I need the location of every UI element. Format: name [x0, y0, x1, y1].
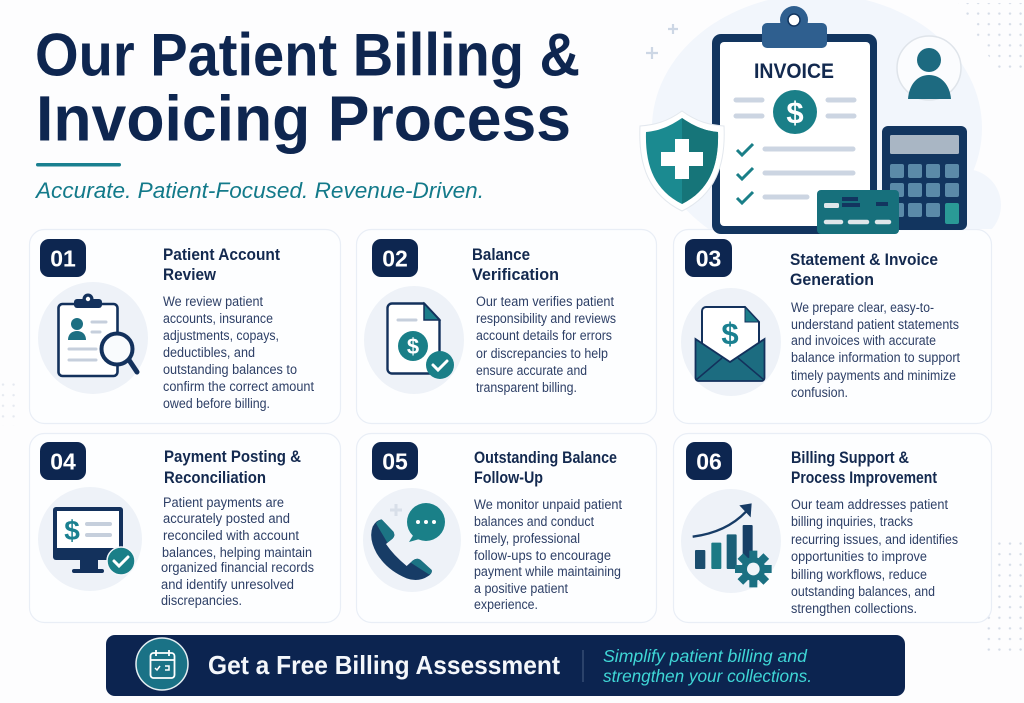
clipboard: $ [786, 95, 804, 130]
body text [474, 497, 622, 612]
badge 04: 04 [50, 448, 76, 474]
heading: Reconciliation [164, 469, 266, 487]
heading: Follow-Up [474, 469, 543, 487]
call to action label: Get a Free Billing Assessment [208, 650, 560, 680]
heading: Billing Support & [791, 449, 909, 467]
call to action subtext: Simplify patient billing and [603, 646, 808, 666]
body text: transparent billing. [476, 380, 577, 395]
body text [791, 300, 960, 400]
heading: Statement & Invoice [790, 251, 938, 269]
body text: and invoices with accurate [791, 333, 936, 348]
patient avatar [897, 36, 961, 100]
badge 03: 03 [696, 246, 721, 272]
badge 01 [40, 239, 86, 277]
body text: billing inquiries, tracks [791, 514, 913, 529]
body text: adjustments, copays, [163, 328, 279, 343]
body text: Patient payments are [163, 495, 284, 510]
body text [161, 495, 314, 608]
body text [476, 294, 616, 395]
icon: growth chart with gear [681, 489, 781, 595]
body text: understand patient statements [791, 317, 959, 332]
badge 06 [686, 442, 732, 480]
panel: step 05 [356, 434, 656, 622]
clipboard [712, 6, 877, 234]
body text: Our team verifies patient [476, 294, 614, 309]
icon: monitor with payment: $ [64, 515, 80, 546]
body text: Our team addresses patient [791, 497, 948, 512]
body text: ensure accurate and [476, 363, 587, 378]
badge 01: 01 [50, 246, 76, 272]
body text: We review patient [163, 294, 263, 309]
badge 02 [372, 239, 418, 277]
body text: strengthen collections. [791, 601, 917, 616]
body text: We prepare clear, easy-to- [791, 300, 934, 315]
heading: Process Improvement [791, 469, 937, 487]
accent rule [36, 163, 121, 166]
body text: outstanding balances to [163, 362, 297, 377]
heading: Outstanding Balance [474, 449, 617, 467]
heading [163, 246, 280, 284]
hero illustration [639, 0, 1001, 234]
shield [640, 111, 724, 211]
badge 05 [372, 442, 418, 480]
body text: responsibility and reviews [476, 311, 616, 326]
body text: a positive patient [474, 581, 568, 596]
body text: timely, professional [474, 531, 580, 546]
icon: calendar [136, 638, 188, 690]
body text: timely payments and minimize [791, 368, 956, 383]
title [35, 22, 580, 154]
body text: balances, helping maintain [162, 545, 312, 560]
panel: step 03 [674, 230, 992, 424]
heading [790, 251, 938, 289]
body text: organized financial records [161, 560, 314, 575]
icon: monitor with payment [38, 487, 142, 591]
body text: or discrepancies to help [476, 346, 608, 361]
call to action subtext [603, 646, 812, 686]
body text: payment while maintaining [474, 564, 621, 579]
body text: billing workflows, reduce [791, 567, 927, 582]
badge 06: 06 [696, 448, 722, 474]
icon: envelope with statement [681, 288, 781, 396]
panel: step 01 [30, 230, 340, 424]
badge 04 [40, 442, 86, 480]
icon: clipboard with magnifier [38, 282, 148, 394]
body text: owed before billing. [163, 396, 270, 411]
heading [164, 448, 301, 487]
body text: balances and conduct [474, 514, 594, 529]
panel: step 04 [30, 434, 340, 622]
panel: step 02 [356, 230, 656, 424]
body text: recurring issues, and identifies [791, 532, 958, 547]
body text: follow-ups to encourage [474, 548, 611, 563]
calculator [882, 126, 967, 230]
body text: opportunities to improve [791, 549, 927, 564]
body text: accurately posted and [163, 511, 290, 526]
panel: step 06 [674, 434, 992, 622]
heading [791, 449, 937, 487]
body text: discrepancies. [161, 593, 242, 608]
body text: balance information to support [791, 350, 960, 365]
body text: confirm the correct amount [163, 379, 314, 394]
body text: and identify unresolved [161, 577, 294, 592]
icon: envelope with statement: $ [721, 316, 739, 351]
body text: experience. [474, 597, 538, 612]
body text: deductibles, and [163, 345, 255, 360]
icon: phone with chat bubble [363, 488, 461, 592]
icon: document with dollar and check: $ [407, 334, 419, 359]
heading: Payment Posting & [164, 448, 301, 466]
heading: Verification [472, 266, 559, 284]
body text [163, 294, 314, 411]
call to action subtext: strengthen your collections. [603, 666, 812, 686]
badge 02: 02 [382, 246, 408, 272]
icon: document with dollar and check [364, 286, 464, 394]
badge 05: 05 [382, 448, 408, 474]
call to action banner [106, 635, 905, 696]
heading [472, 246, 559, 284]
tagline: Accurate. Patient-Focused. Revenue-Driven. [34, 178, 484, 203]
heading: Generation [790, 271, 874, 289]
body text: confusion. [791, 385, 848, 400]
heading: Patient Account [163, 246, 280, 264]
title: Our Patient Billing & [35, 22, 580, 88]
body text: outstanding balances, and [791, 584, 935, 599]
body text: accounts, insurance [163, 311, 273, 326]
clipboard: INVOICE [754, 60, 834, 83]
body text: account details for errors [476, 328, 612, 343]
title: Invoicing Process [36, 82, 571, 154]
heading: Review [163, 266, 216, 284]
body text [791, 497, 958, 616]
body text: We monitor unpaid patient [474, 497, 622, 512]
body text: reconciled with account [163, 528, 299, 543]
badge 03 [685, 239, 732, 277]
heading [474, 449, 617, 487]
heading: Balance [472, 246, 530, 264]
credit card [817, 190, 899, 234]
